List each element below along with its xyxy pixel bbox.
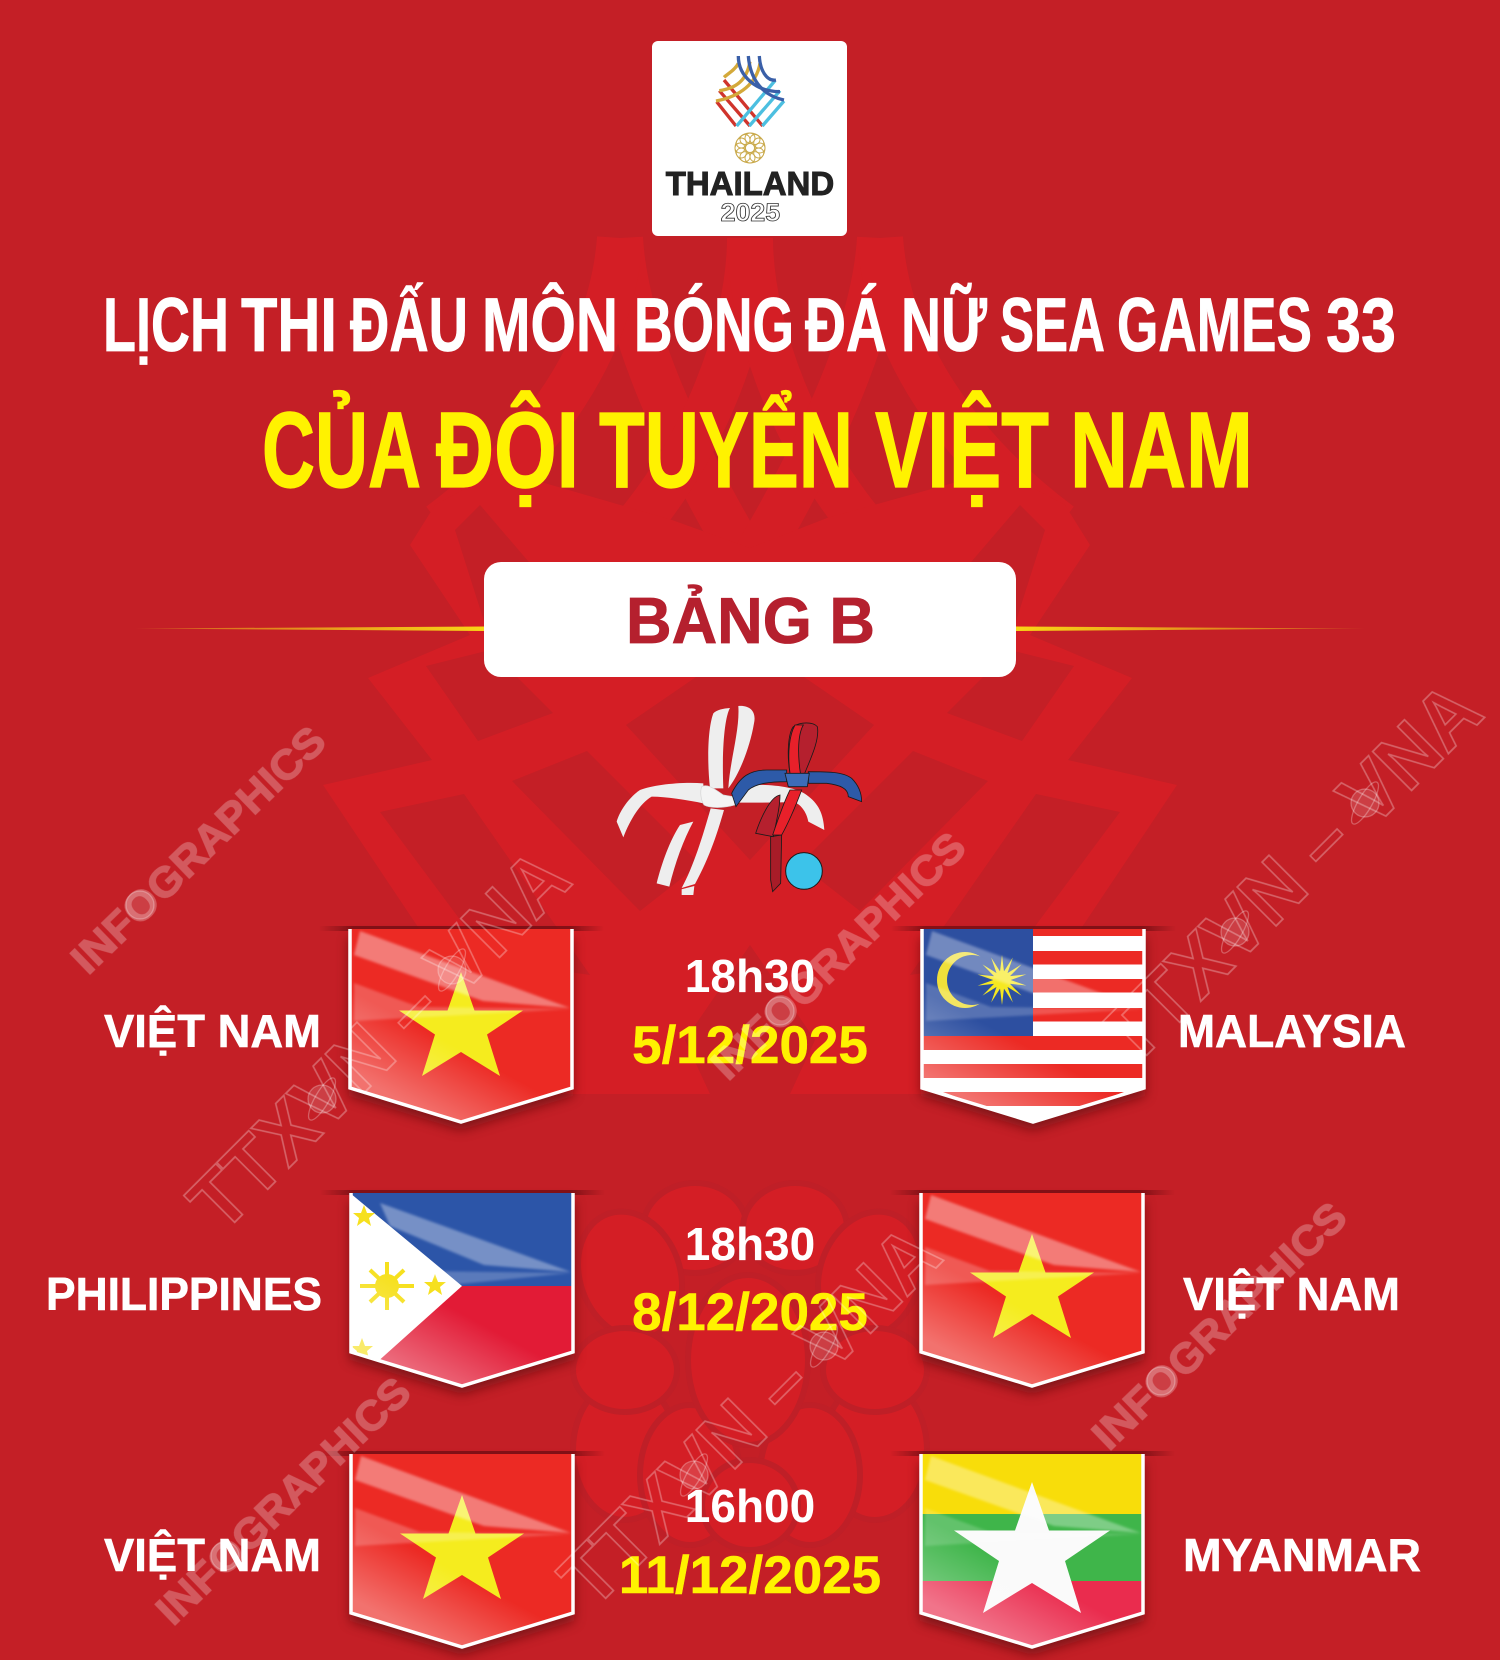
title line 1: SEA	[1000, 283, 1105, 368]
title line 2	[262, 389, 1253, 510]
title line 1: 33	[1326, 283, 1396, 368]
logo mark: woven ribbons	[716, 56, 784, 126]
title line 2: ĐỘI	[436, 389, 579, 510]
title line 1: GAMES	[1117, 283, 1312, 368]
team label: Myanmar: MYANMAR	[1183, 1529, 1421, 1581]
flag: Vietnam	[890, 1190, 1175, 1394]
white ribbon	[617, 706, 824, 895]
flag: Philippines	[320, 1190, 605, 1394]
title line 1: BÓNG	[634, 283, 794, 368]
watermark: INFOGRAPHICS: INFOGRAPHICS	[147, 1368, 420, 1633]
team label: Việt Nam: VIỆT NAM	[104, 1529, 321, 1581]
title line 1: NỮ	[901, 283, 988, 368]
kickoff time: 16h00	[685, 1480, 815, 1532]
logo card: Thailand 2025	[652, 41, 847, 236]
title line 1: ĐÁ	[805, 283, 887, 368]
watermark: TTXVN - VNA outlines: TTXVN – VNA	[171, 832, 586, 1247]
title line 2: NAM	[1070, 389, 1253, 510]
flag: Vietnam	[320, 1451, 605, 1655]
watermark: TTXVN - VNA outlines: TTXVN – VNA	[542, 1208, 957, 1623]
background: lattice emblem pattern	[323, 238, 1177, 1094]
ball	[786, 853, 822, 889]
logo wordmark: THAILAND	[666, 166, 834, 203]
title line 1: LỊCH	[103, 283, 229, 368]
watermark: INFOGRAPHICS: INFOGRAPHICS	[62, 717, 335, 982]
logo year: 2025	[721, 199, 780, 227]
title line 2: CỦA	[262, 389, 421, 510]
team label: Malaysia: MALAYSIA	[1178, 1005, 1406, 1057]
icon: ribbons and ball	[617, 706, 862, 895]
watermark: INFOGRAPHICS: INFOGRAPHICS	[1083, 1193, 1356, 1458]
team label: Việt Nam: VIỆT NAM	[104, 1005, 321, 1057]
red and blue ribbon	[732, 723, 862, 892]
title line 1: THI	[241, 283, 337, 368]
match date: 11/12/2025	[619, 1546, 881, 1605]
title line 2: TUYỂN	[599, 389, 853, 510]
flag: Vietnam	[319, 926, 604, 1130]
match date: 5/12/2025	[632, 1016, 868, 1075]
background: flower emblem pattern	[561, 1183, 939, 1550]
divider line right	[1015, 626, 1365, 631]
flag: Myanmar	[890, 1451, 1175, 1655]
kickoff time: 18h30	[685, 1218, 815, 1270]
match 1: Việt Nam vs Malaysia	[104, 926, 1406, 1130]
watermark: TTXVN - VNA outlines	[171, 665, 1498, 1623]
team label: Philippines: PHILIPPINES	[46, 1268, 322, 1320]
group badge: Bảng B: BẢNG B	[626, 584, 875, 657]
watermark: INFOGRAPHICS: INFOGRAPHICS	[702, 823, 975, 1088]
kickoff time: 18h30	[685, 950, 815, 1002]
title line 1	[103, 283, 1396, 368]
watermark: globes	[126, 779, 1383, 1570]
watermark: INFOGRAPHICS	[62, 717, 1356, 1633]
group badge: Bảng B	[484, 562, 1016, 677]
title line 1: ĐẤU	[350, 283, 468, 368]
title line 2: VIỆT	[875, 389, 1049, 510]
flag: Malaysia	[891, 926, 1176, 1130]
team label: Việt Nam: VIỆT NAM	[1183, 1268, 1400, 1320]
logo mark: gold flower	[735, 133, 765, 163]
match 3: Việt Nam vs Myanmar	[104, 1451, 1421, 1655]
title line 1: MÔN	[482, 283, 618, 368]
match date: 8/12/2025	[632, 1283, 868, 1342]
match 2: Philippines vs Việt Nam	[46, 1190, 1400, 1394]
divider line left	[135, 626, 484, 631]
